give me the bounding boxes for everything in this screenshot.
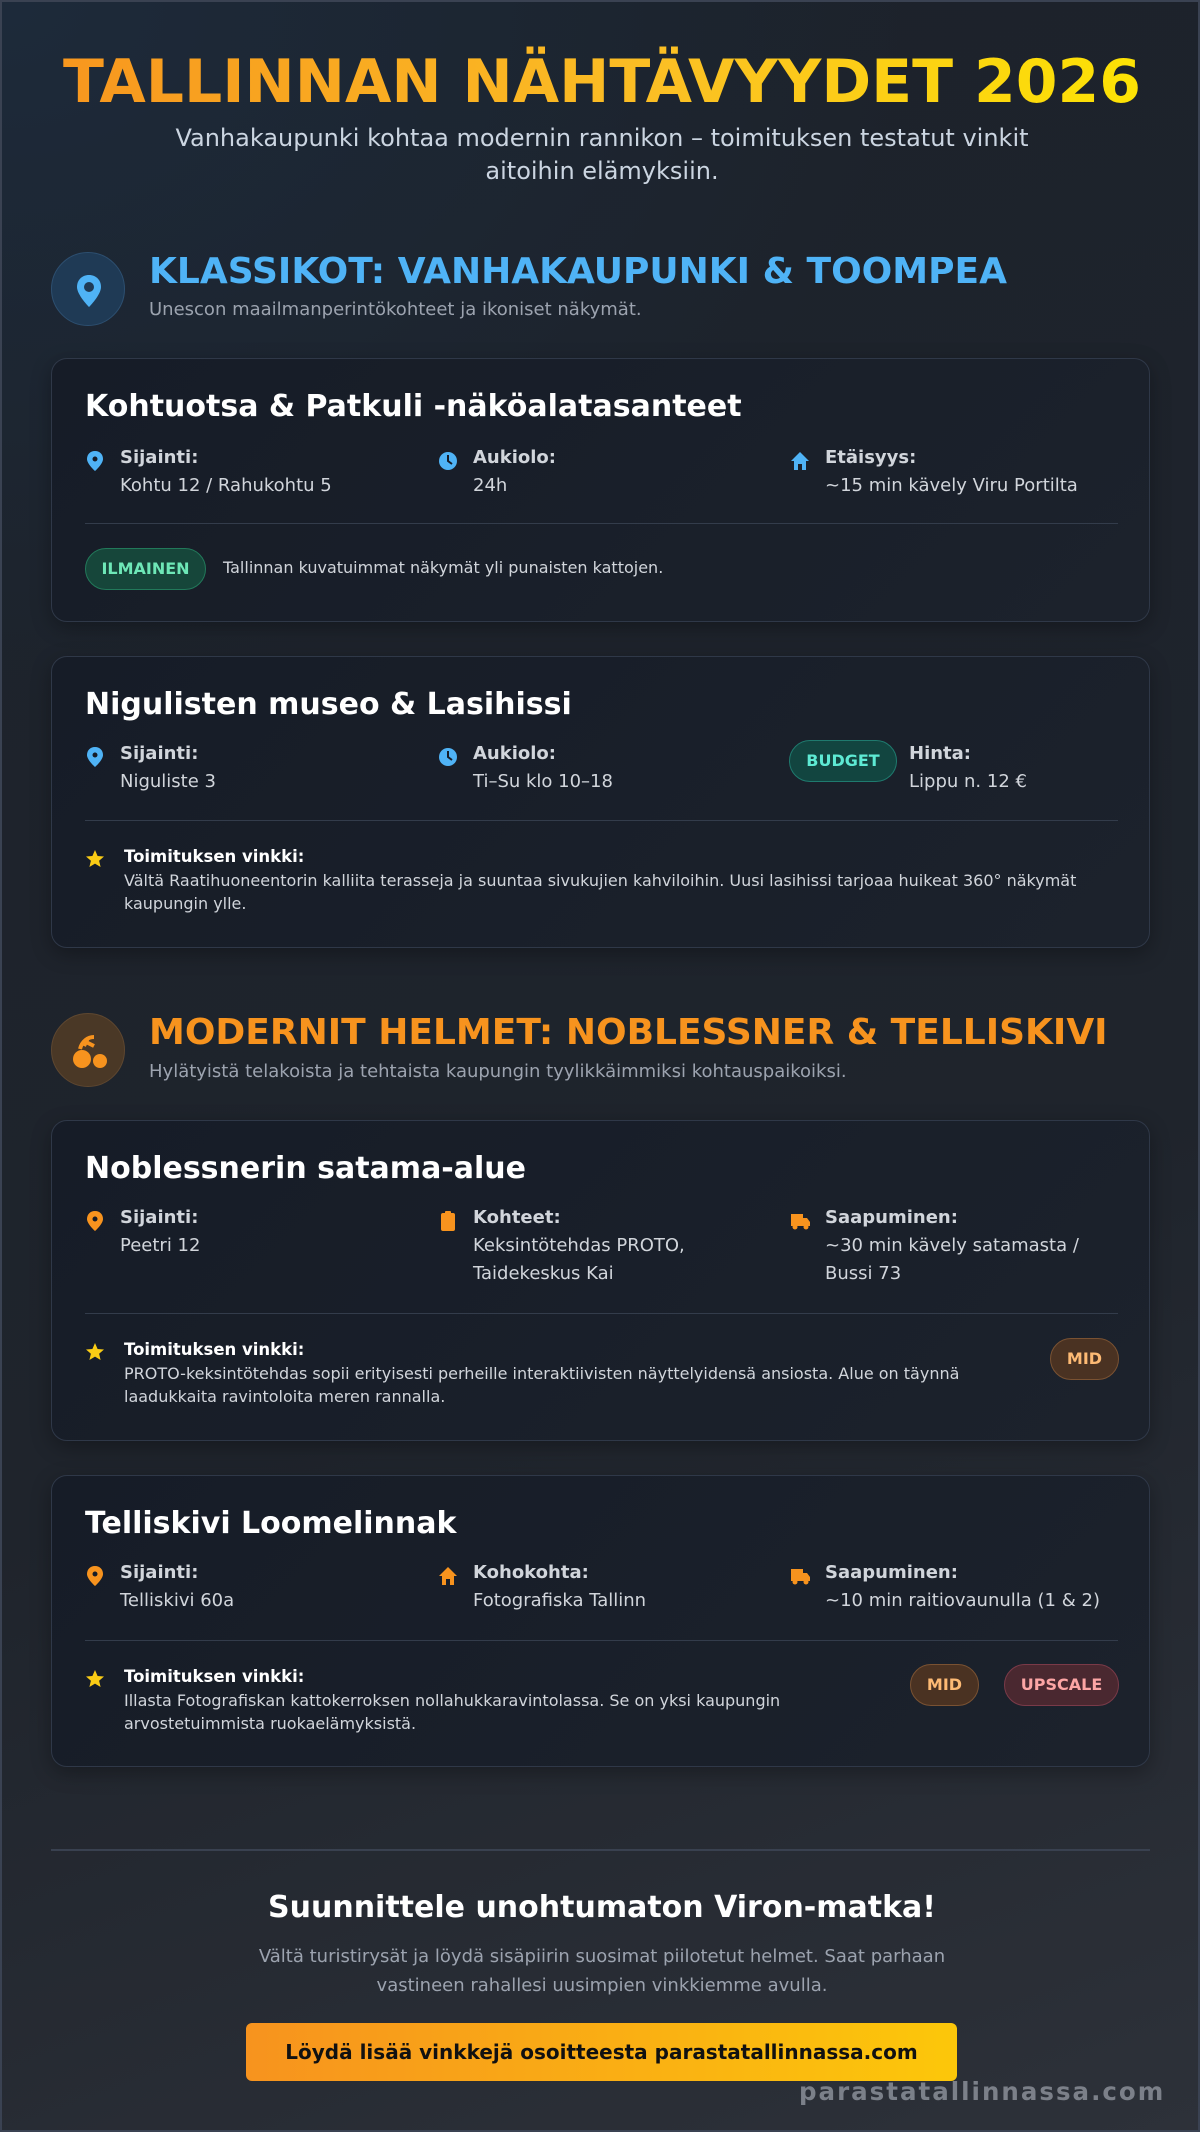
panel: Kohtuotsa: Etäisyys:: [825, 447, 916, 468]
badge: ilmainen: [85, 548, 206, 590]
card title: Kohtuotsa & Patkuli -näköalatasanteet: [85, 389, 742, 424]
panel: Nigulisten: Aukiolo:: [473, 743, 556, 764]
info: kohokohta: [439, 1562, 646, 1611]
subtitle: Vanhakaupunki kohtaa modernin rannikon – toimituksen testatut vinkit aitoihin elämyksiin.: [175, 124, 1029, 185]
panel: Nigulisten: Toimituksen vinkki:: [124, 847, 304, 866]
panel: Telliskivi: Illasta Fotografiskan kattokerroksen nollahukkaravintolassa. Se on yksi kaupungin arvostetuimmista ruokaelämyksistä.: [124, 1691, 780, 1733]
panel: Telliskivi: Telliskivi 60a: [120, 1590, 234, 1611]
panel: Noblessner: Kohteet:: [473, 1207, 561, 1228]
section 2 subtitle: Hylätyistä telakoista ja tehtaista kaupungin tyylikkäimmiksi kohtauspaikoiksi.: [149, 1061, 847, 1082]
badge: mid: MID: [1067, 1349, 1102, 1368]
info: saapuminen: [791, 1562, 1100, 1611]
badge: budget: [789, 740, 897, 782]
heading: section 2: MODERNIT HELMET: NOBLESSNER & TELLISKIVI: [149, 1012, 1108, 1053]
panel: Nigulisten: Lippu n. 12 €: [909, 771, 1027, 792]
panel: Nigulisten: [51, 656, 1150, 948]
panel: Nigulisten: Hinta:: [909, 743, 971, 764]
heading: section 1: KLASSIKOT: VANHAKAUPUNKI & TOOMPEA: [149, 251, 1007, 292]
badge: upscale: UPSCALE: [1021, 1675, 1102, 1694]
panel: Telliskivi: Fotografiska Tallinn: [473, 1590, 646, 1611]
badge: mid: [910, 1664, 979, 1706]
badge: mid: [1050, 1338, 1119, 1380]
info: sijainti: [87, 447, 332, 496]
info: etaisyys: [791, 447, 1078, 496]
badge: budget: BUDGET: [806, 751, 880, 770]
panel: Telliskivi: [51, 1475, 1150, 1767]
panel: Telliskivi: Toimituksen vinkki:: [124, 1667, 304, 1686]
panel: Kohtuotsa: ~15 min kävely Viru Portilta: [825, 475, 1078, 496]
panel: Kohtuotsa: Sijainti:: [120, 447, 198, 468]
cta button: [246, 2023, 957, 2081]
info: aukiolo: [439, 743, 613, 792]
panel: Noblessner: Taidekeskus Kai: [473, 1263, 614, 1284]
badge: ilmainen: ILMAINEN: [101, 559, 190, 578]
section 1 subtitle: Unescon maailmanperintökohteet ja ikoniset näkymät.: [149, 299, 642, 320]
card title: Nigulisten museo & Lasihissi: [85, 687, 572, 722]
panel: Telliskivi: ~10 min raitiovaunulla (1 & 2): [825, 1590, 1100, 1611]
panel: Noblessner: Saapuminen:: [825, 1207, 958, 1228]
panel: Noblessner: Bussi 73: [825, 1263, 901, 1284]
tip: [86, 1667, 780, 1733]
footer text: Vältä turistirysät ja löydä sisäpiirin suosimat piilotetut helmet. Saat parhaan vastineen rahallesi uusimpien vinkkiemme avulla.: [259, 1946, 945, 1996]
panel: Noblessner: Sijainti:: [120, 1207, 198, 1228]
card title: Noblessnerin satama-alue: [85, 1151, 526, 1186]
panel: Nigulisten: Niguliste 3: [120, 771, 216, 792]
panel: Kohtuotsa: Kohtu 12 / Rahukohtu 5: [120, 475, 332, 496]
panel: Noblessner: ~30 min kävely satamasta /: [825, 1235, 1079, 1256]
panel: Telliskivi: Sijainti:: [120, 1562, 198, 1583]
panel: Telliskivi: Kohokohta:: [473, 1562, 589, 1583]
panel: Kohtuotsa: 24h: [473, 475, 507, 496]
info: hinta: [909, 743, 1027, 792]
panel: Noblessner: [51, 1120, 1150, 1441]
panel: Nigulisten: Vältä Raatihuoneentorin kalliita terasseja ja suuntaa sivukujien kahviloihin. Uusi lasihissi tarjoaa huikeat 360° näkymät kaupungin ylle.: [124, 871, 1076, 913]
note: Tallinnan kuvatuimmat näkymät yli punaisten kattojen.: [223, 558, 663, 577]
tip: [86, 847, 1076, 913]
badge: upscale: [1004, 1664, 1119, 1706]
panel: Noblessner: Toimituksen vinkki:: [124, 1340, 304, 1359]
cta button: Löydä lisää vinkkejä osoitteesta parastatallinnassa.com: [285, 2040, 918, 2064]
panel: Noblessner: Peetri 12: [120, 1235, 200, 1256]
panel: Nigulisten: Ti–Su klo 10–18: [473, 771, 613, 792]
info: sijainti: [87, 1562, 234, 1611]
watermark: parastatallinnassa.com: [799, 2077, 1165, 2106]
panel: Nigulisten: Sijainti:: [120, 743, 198, 764]
tip: [86, 1340, 959, 1406]
panel: Telliskivi: Saapuminen:: [825, 1562, 958, 1583]
card title: Telliskivi Loomelinnak: [85, 1506, 456, 1541]
panel: Kohtuotsa: [51, 358, 1150, 622]
info: aukiolo: [439, 447, 556, 496]
info: sijainti: [87, 743, 216, 792]
footer heading: Suunnittele unohtumaton Viron-matka!: [268, 1890, 936, 1925]
panel: Noblessner: Keksintötehdas PROTO,: [473, 1235, 685, 1256]
title: TALLINNAN NÄHTÄVYYDET 2026: [63, 47, 1141, 117]
info: saapuminen: [791, 1207, 1079, 1284]
info: sijainti: [87, 1207, 200, 1256]
info: kohteet: [441, 1207, 685, 1284]
panel: Noblessner: PROTO-keksintötehdas sopii erityisesti perheille interaktiivisten näyttelyidensä ansiosta. Alue on täynnä laadukkaita ravintoloita meren rannalla.: [124, 1364, 959, 1406]
icon: section 1 pin: [51, 252, 125, 326]
badge: mid: MID: [927, 1675, 962, 1694]
icon: section 2: [51, 1013, 125, 1087]
panel: Kohtuotsa: Aukiolo:: [473, 447, 556, 468]
